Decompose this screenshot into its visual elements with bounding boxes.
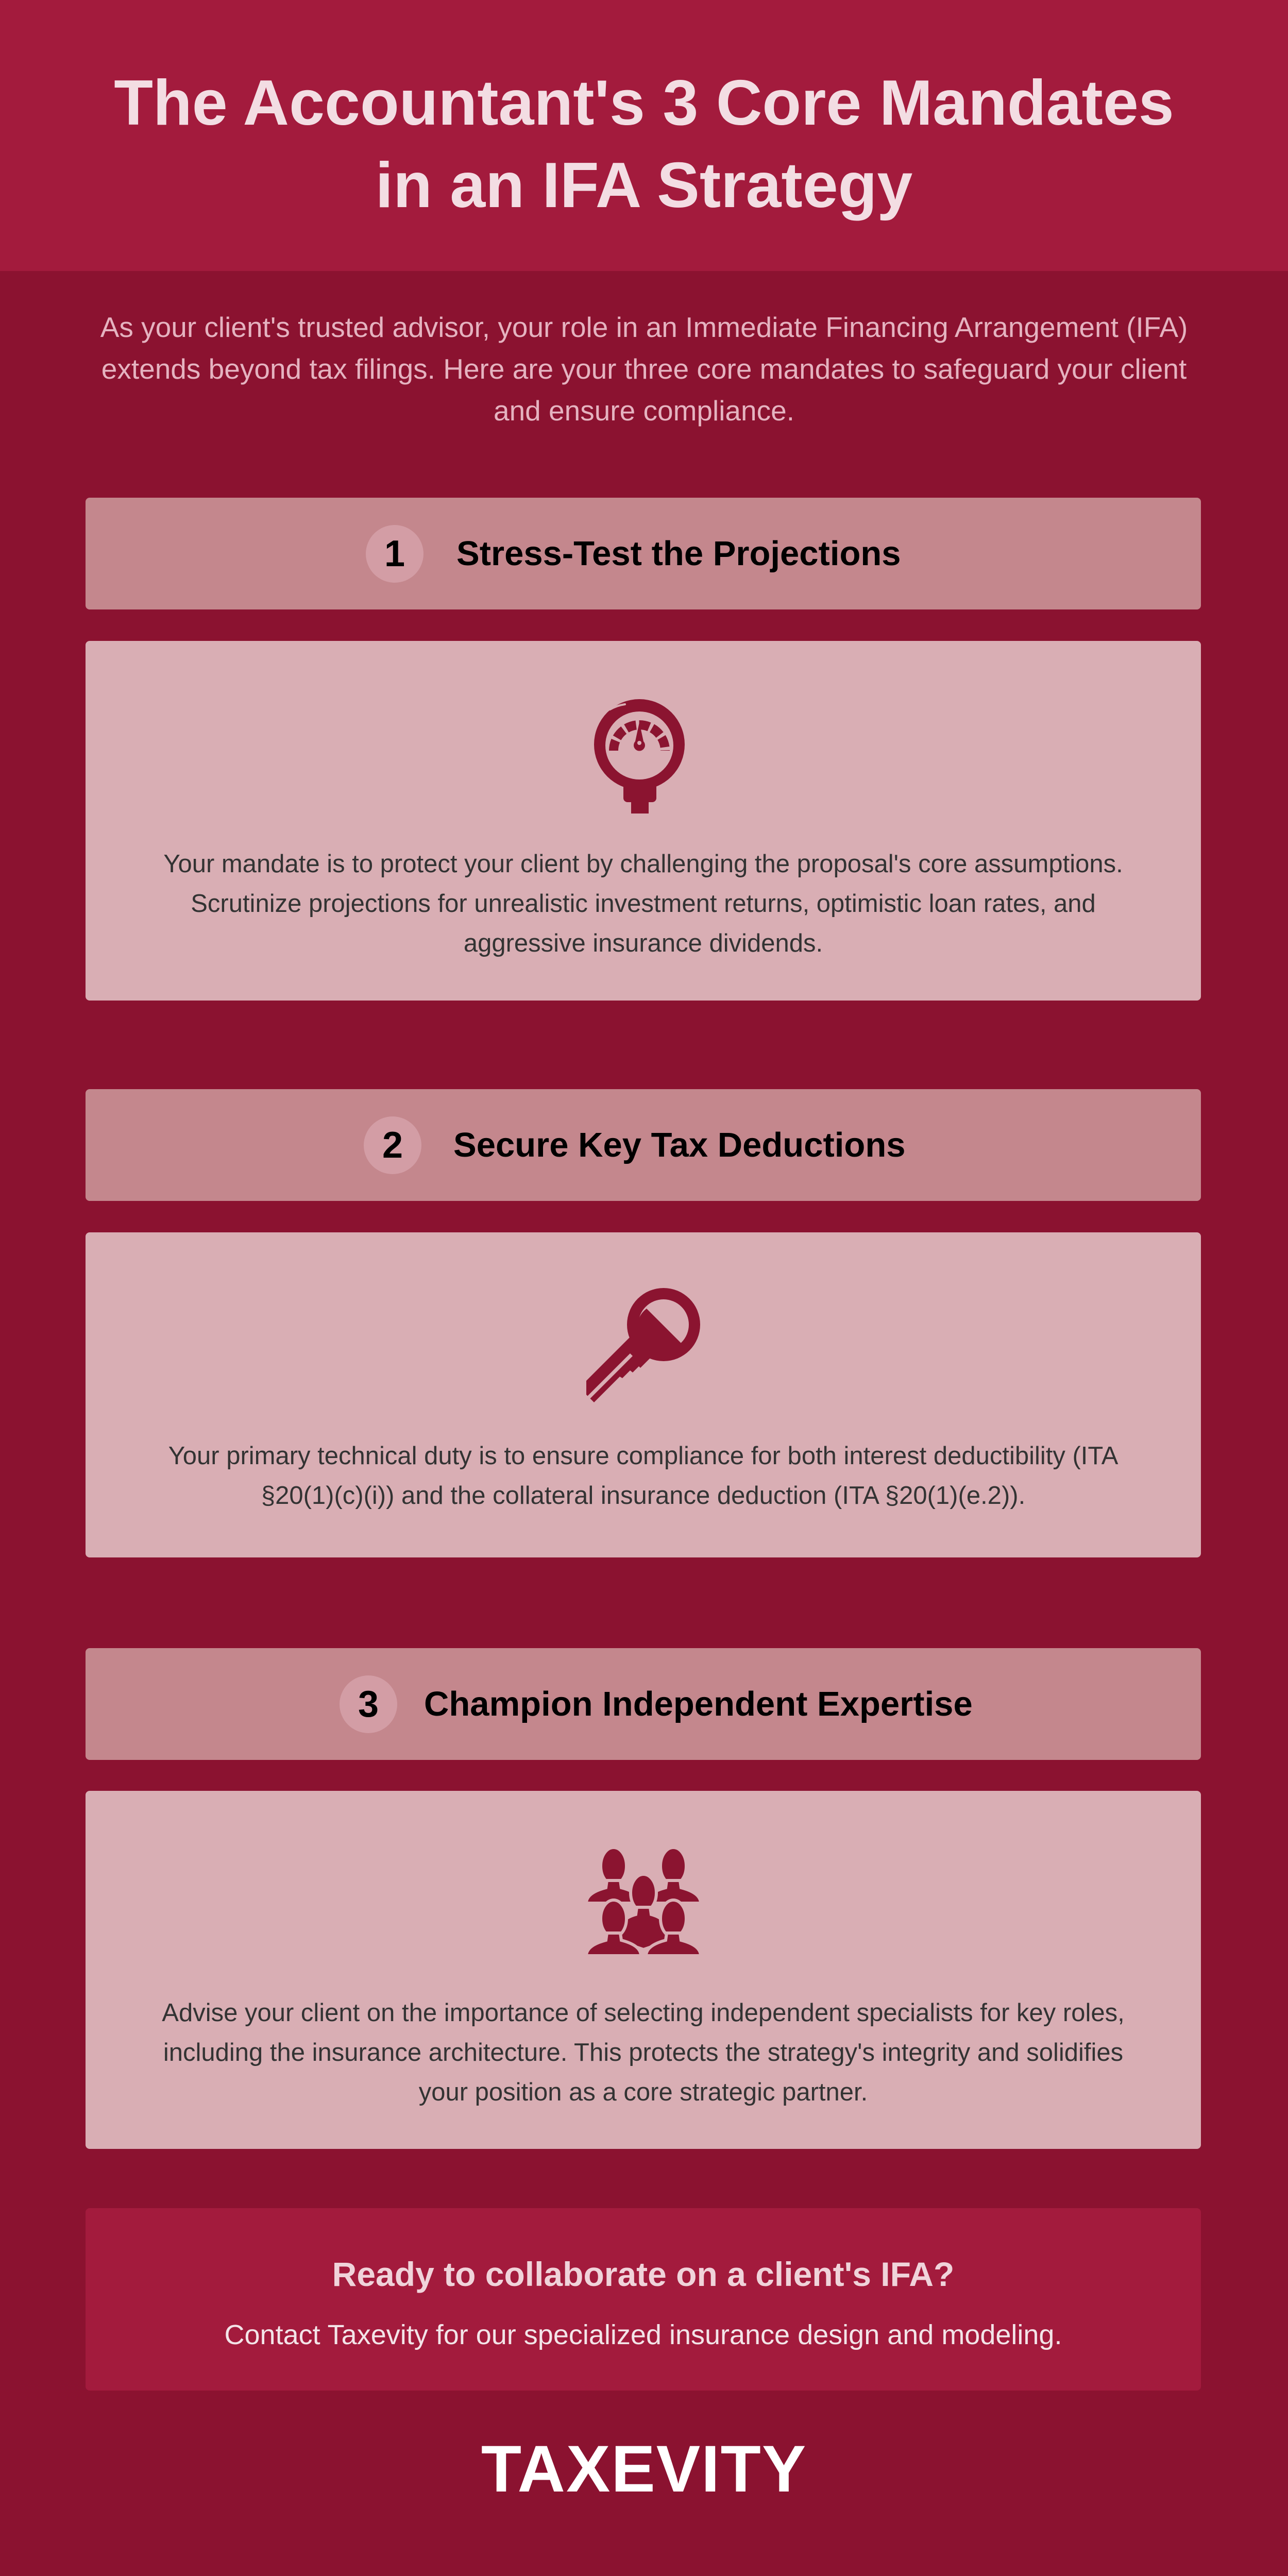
body text 3: Advise your client on the importance of selecting independent specialists for key roles, bbox=[162, 1999, 1125, 2027]
heading 2: Secure Key Tax Deductions bbox=[453, 1126, 906, 1164]
header band bbox=[0, 0, 1288, 271]
title bbox=[114, 67, 1174, 221]
body text 1: aggressive insurance dividends. bbox=[464, 929, 823, 957]
icon: key bbox=[586, 1288, 700, 1402]
intro text bbox=[100, 311, 1188, 427]
intro text: and ensure compliance. bbox=[494, 395, 794, 427]
body text 1: Your mandate is to protect your client by challenging the proposal's core assumptions. bbox=[163, 850, 1123, 878]
panel header 3 bbox=[86, 1648, 1201, 1760]
body text 3 bbox=[162, 1999, 1125, 2106]
call to action box bbox=[86, 2208, 1201, 2391]
CTA subtext: Contact Taxevity for our specialized insurance design and modeling. bbox=[225, 2319, 1062, 2350]
number 2: 2 bbox=[382, 1125, 403, 1166]
title: The Accountant's 3 Core Mandates bbox=[114, 67, 1174, 139]
intro text: As your client's trusted advisor, your role in an Immediate Financing Arrangement (IFA) bbox=[100, 311, 1188, 343]
intro text: extends beyond tax filings. Here are your three core mandates to safeguard your client bbox=[101, 353, 1187, 385]
heading 1: Stress-Test the Projections bbox=[456, 534, 901, 573]
body text 1 bbox=[163, 850, 1123, 957]
number 3: 3 bbox=[358, 1684, 379, 1725]
body text 2: Your primary technical duty is to ensure compliance for both interest deductibility (ITA bbox=[168, 1442, 1118, 1470]
number 1: 1 bbox=[384, 533, 405, 574]
panel 3 content bbox=[86, 1791, 1201, 2149]
icon: people group bbox=[588, 1849, 699, 1954]
body text 2 bbox=[168, 1442, 1118, 1510]
icon: gauge bbox=[594, 699, 685, 814]
panel 1 content bbox=[86, 641, 1201, 1001]
number 3 bbox=[340, 1675, 397, 1733]
heading 3: Champion Independent Expertise bbox=[424, 1685, 973, 1723]
body text 3: your position as a core strategic partner. bbox=[419, 2078, 868, 2106]
logo: TAXEVITY: TAXEVITY bbox=[481, 2432, 807, 2506]
body text 3: including the insurance architecture. This protects the strategy's integrity and solidifies bbox=[163, 2039, 1123, 2066]
panel header 2 bbox=[86, 1089, 1201, 1201]
title: in an IFA Strategy bbox=[376, 150, 912, 221]
body text 1: Scrutinize projections for unrealistic investment returns, optimistic loan rates, and bbox=[191, 890, 1096, 918]
panel header 1 bbox=[86, 498, 1201, 609]
body text 2: §20(1)(c)(i)) and the collateral insurance deduction (ITA §20(1)(e.2)). bbox=[261, 1482, 1025, 1510]
panel 2 content bbox=[86, 1232, 1201, 1557]
CTA heading: Ready to collaborate on a client's IFA? bbox=[332, 2255, 954, 2293]
number 1 bbox=[366, 525, 423, 583]
number 2 bbox=[364, 1116, 421, 1174]
